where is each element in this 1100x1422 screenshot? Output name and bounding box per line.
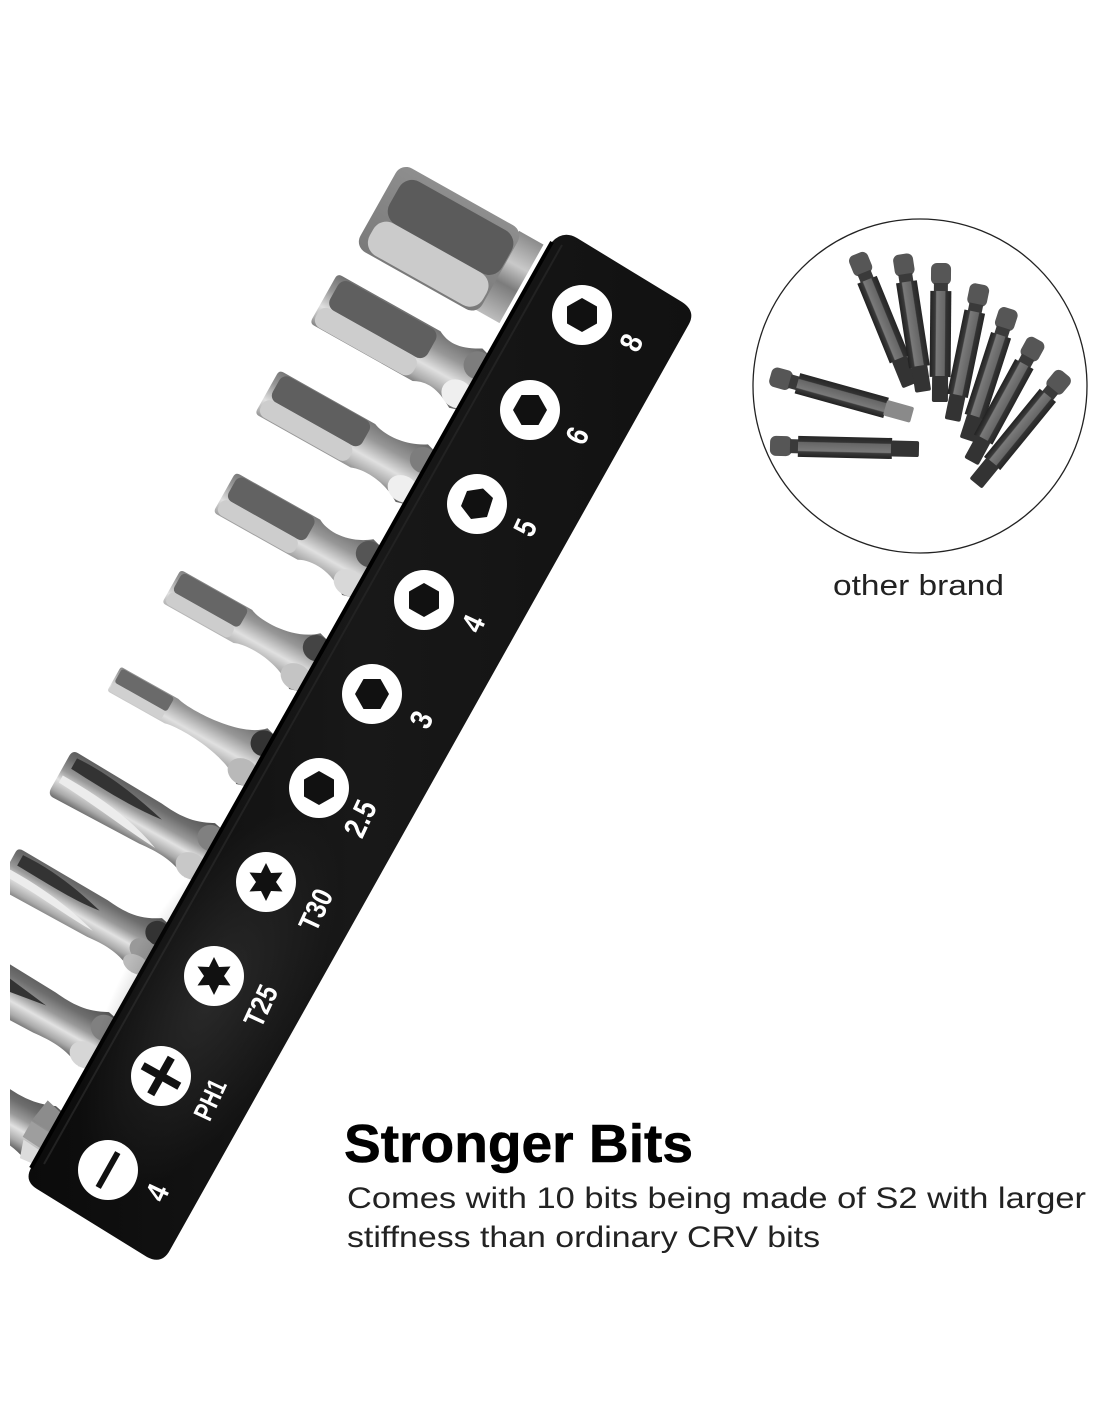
small bit 1 [847, 250, 920, 389]
label: 6: 6 [559, 422, 597, 450]
icon: hex 2.5 [289, 758, 349, 818]
text block: description [347, 1182, 1086, 1254]
label: 3: 3 [403, 706, 441, 734]
text block: description: Comes with 10 bits being made of S2 with larger [347, 1182, 1086, 1215]
icon: torx T25 [184, 946, 244, 1006]
small bit 2 [892, 253, 934, 393]
caption: other brand: other brand [833, 570, 1004, 602]
icon: hex 4 [394, 570, 454, 630]
icon: hex 8 [552, 285, 612, 345]
label: T30: T30 [292, 884, 340, 936]
text block: description: stiffness than ordinary CRV bits [347, 1221, 820, 1254]
label: PH1: PH1 [189, 1075, 233, 1125]
small bit 5 [957, 305, 1020, 443]
label: 8: 8 [613, 329, 651, 357]
bit: hex 2.5 [108, 668, 273, 786]
label: slotted 4: 4 [139, 1179, 177, 1207]
holder strip [29, 235, 691, 1260]
bit: hex 3 [163, 571, 326, 691]
bit: slotted 4 [10, 1089, 61, 1163]
icon: hex 6 [500, 380, 560, 440]
bit: phillips PH1 [10, 964, 114, 1068]
panel: bit holder set [0, 163, 691, 1260]
small bit 8 [768, 366, 915, 425]
icon: hex 3 [342, 664, 402, 724]
bit: hex 8 [355, 163, 545, 327]
icon: torx T30 [236, 852, 296, 912]
label: 2.5: 2.5 [338, 795, 384, 843]
icon: phillips PH1 [131, 1046, 191, 1106]
heading: Stronger Bits: Stronger Bits [344, 1114, 693, 1174]
small bit 9 [770, 435, 919, 460]
label: T25: T25 [237, 980, 285, 1032]
bit: hex 5 [256, 372, 433, 504]
small bit 3 [929, 263, 952, 402]
label: 5: 5 [507, 514, 545, 542]
icon: slotted 4 [78, 1140, 138, 1200]
small bit 7 [968, 367, 1074, 490]
bit: torx T30 [50, 752, 220, 880]
panel: other brand inset circle [753, 219, 1087, 553]
small bit 4 [942, 282, 991, 423]
bit: torx T25 [10, 849, 167, 974]
small bit 6 [962, 334, 1047, 467]
icon: hex 5 [447, 474, 507, 534]
bit: hex 4 [214, 474, 380, 597]
label: 4: 4 [455, 610, 493, 638]
bit: hex 6 [311, 275, 487, 410]
